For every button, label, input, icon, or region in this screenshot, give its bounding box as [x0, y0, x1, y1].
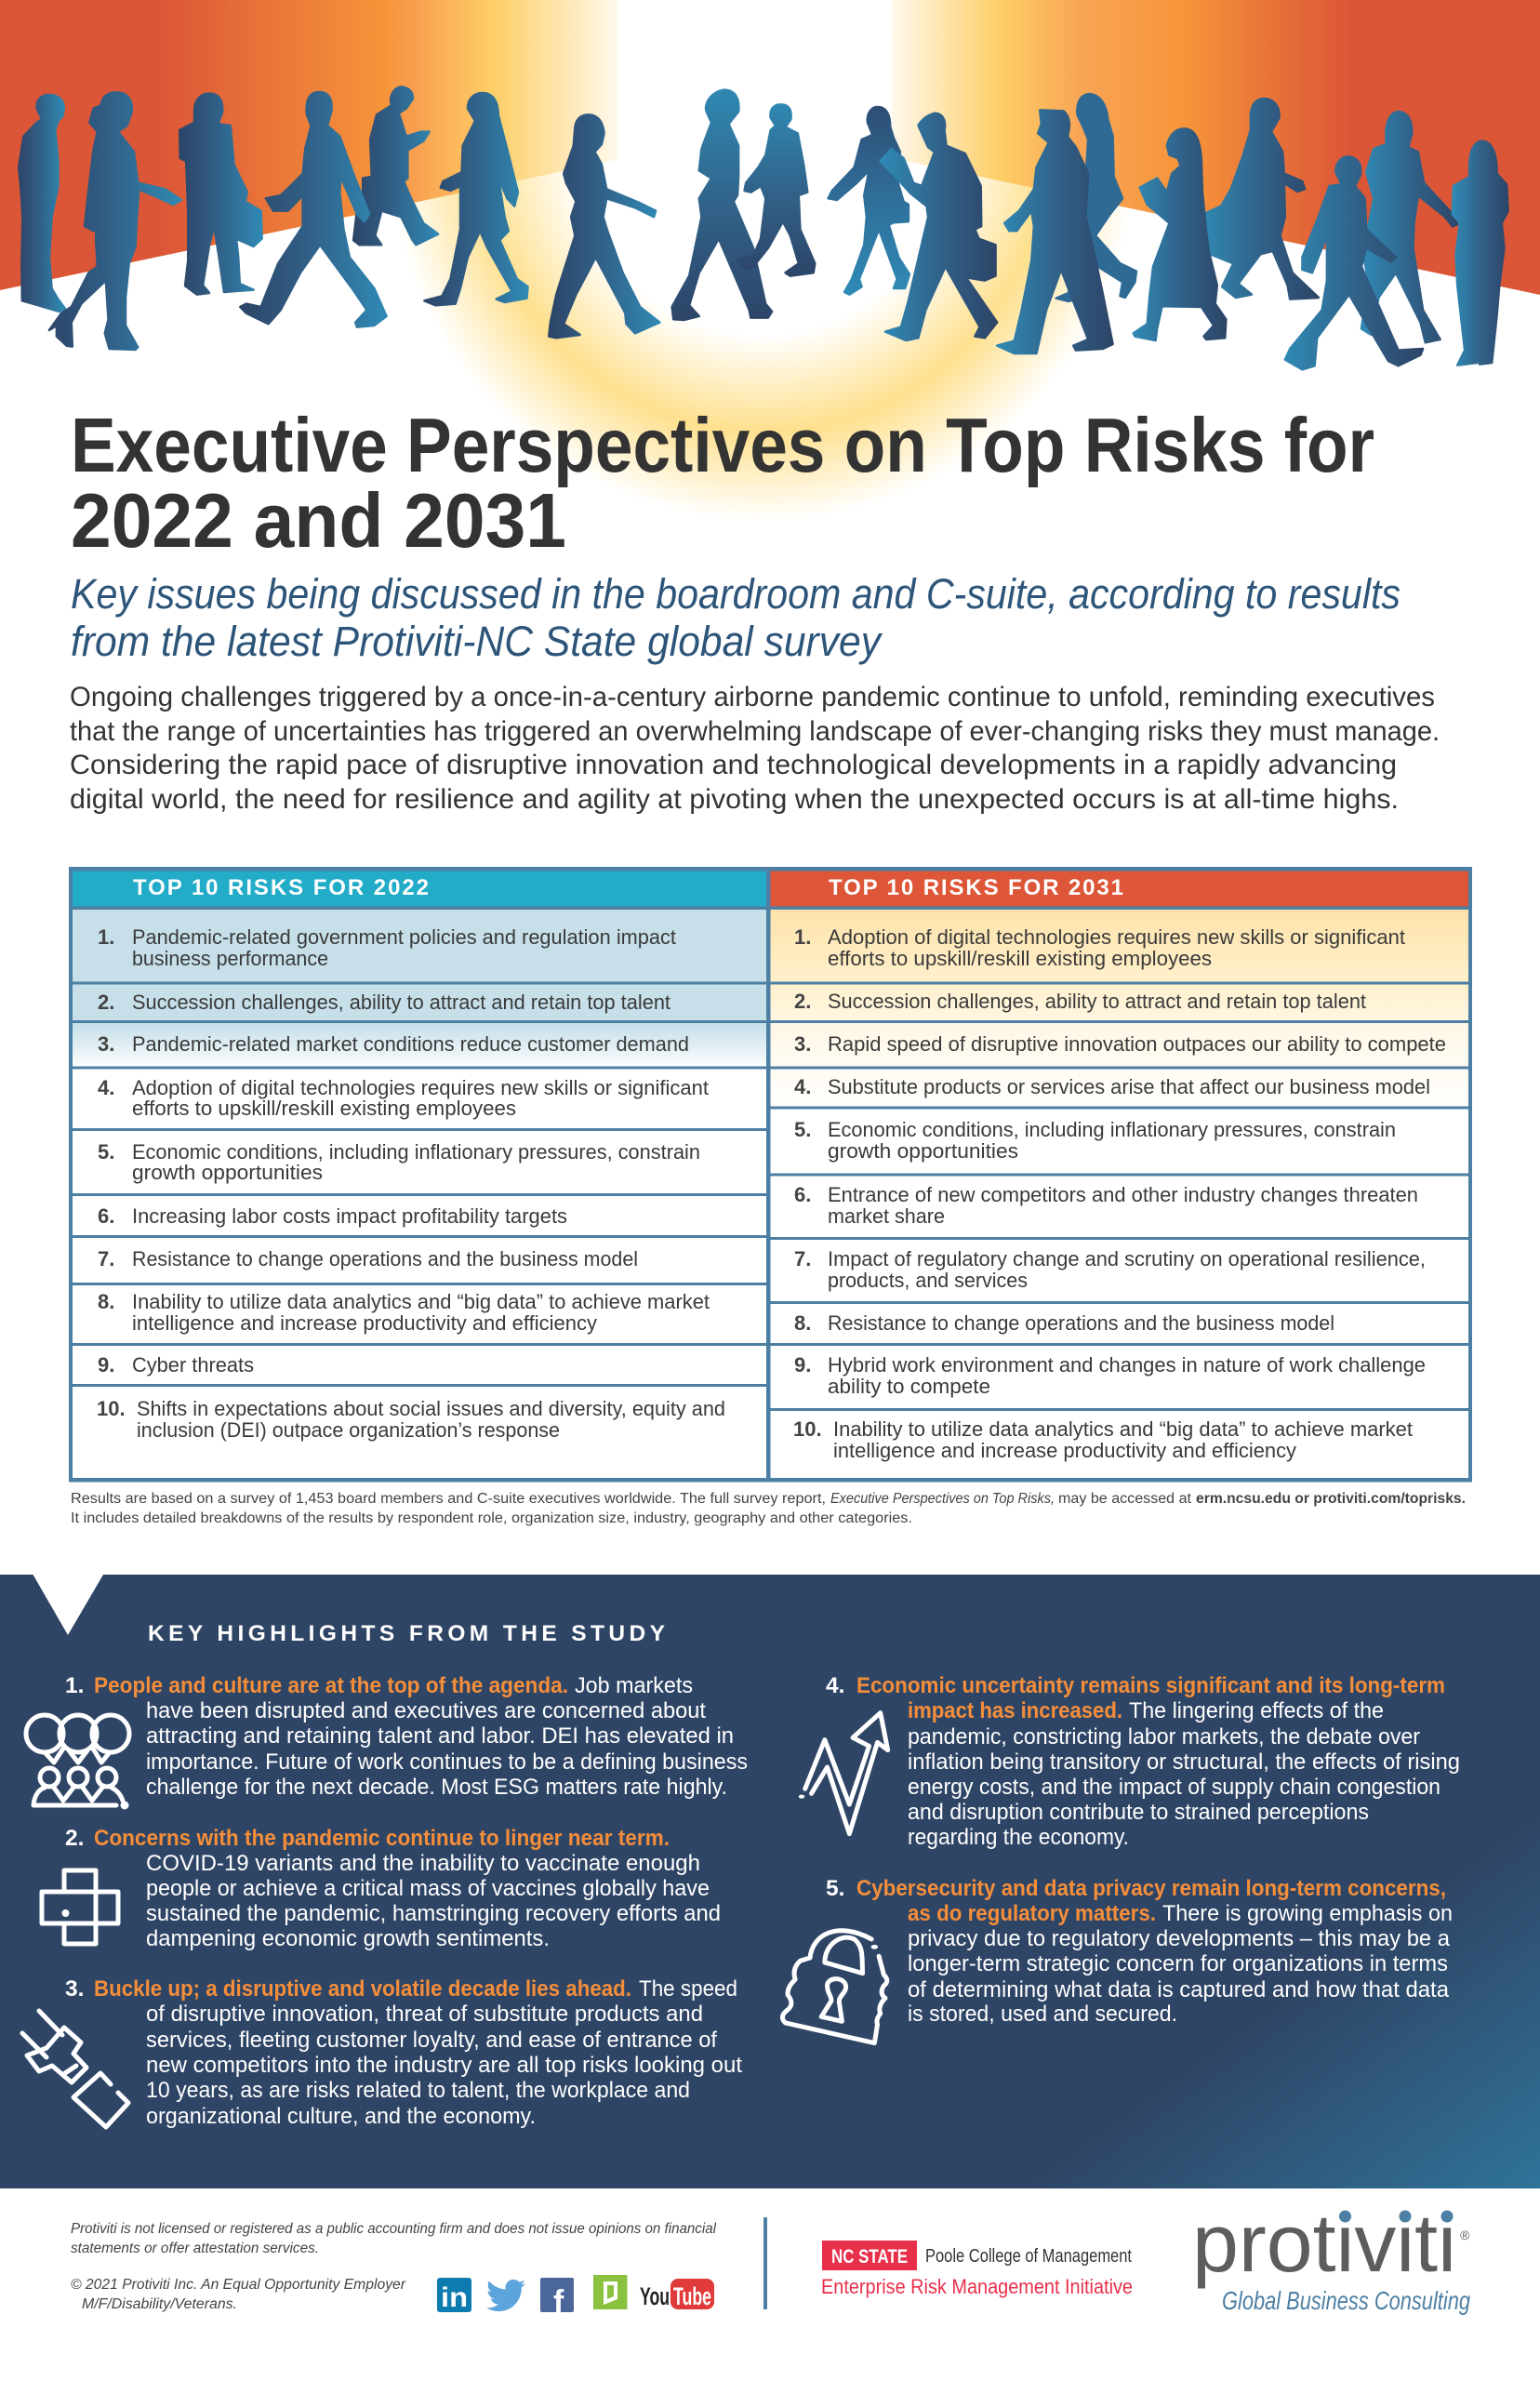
left column fills	[71, 908, 768, 1070]
icon: rising zigzag arrow	[799, 1713, 888, 1834]
right column list: efforts to upskill/reskill existing employees	[828, 947, 1212, 970]
left column list: 8.	[98, 1290, 114, 1313]
highlight 2	[65, 1826, 721, 1951]
left column list: Cyber threats	[132, 1353, 254, 1377]
icon: youtube	[640, 2279, 714, 2310]
subtitle: Key issues being discussed in the boardroom and C-suite, according to results	[71, 570, 1401, 618]
highlight 1: 1.	[65, 1673, 84, 1698]
footer divider	[763, 2217, 767, 2309]
logo: protiviti: ®	[1460, 2228, 1470, 2242]
right column list: Hybrid work environment and changes in nature of work challenge	[828, 1353, 1426, 1377]
right column list: products, and services	[828, 1269, 1028, 1292]
intro paragraph: Ongoing challenges triggered by a once-in-a-century airborne pandemic continue to unfold, reminding executives	[70, 682, 1435, 712]
icon: green d	[593, 2275, 627, 2309]
footer legal text: M/F/Disability/Veterans.	[82, 2296, 237, 2312]
highlight 1: Job markets	[575, 1673, 693, 1698]
key highlights panel	[0, 1575, 1540, 2188]
right column list: 1.	[794, 925, 811, 949]
right column list: Resistance to change operations and the business model	[828, 1311, 1334, 1335]
right column list: growth opportunities	[828, 1139, 1018, 1163]
right column list: 8.	[794, 1311, 811, 1335]
logo: nc state: NC STATE	[831, 2246, 908, 2268]
highlight 4: energy costs, and the impact of supply chain congestion	[908, 1775, 1440, 1800]
right column list: 9.	[794, 1353, 811, 1377]
left column list: 10.	[97, 1397, 126, 1420]
highlight 3: 3.	[65, 1976, 84, 2002]
left column list: 6.	[98, 1204, 114, 1228]
left column list: Economic conditions, including inflationary pressures, constrain	[132, 1140, 700, 1164]
title	[71, 402, 1374, 564]
highlight 5	[826, 1876, 1453, 2027]
highlight 3: of disruptive innovation, threat of substitute products and	[146, 2002, 703, 2027]
highlight 1	[65, 1673, 748, 1800]
highlight 3: services, fleeting customer loyalty, and ease of entrance of	[146, 2028, 717, 2053]
background wall gradient	[0, 0, 1540, 295]
right column list	[793, 925, 1446, 1462]
left column list: Pandemic-related government policies and regulation impact	[132, 925, 676, 949]
icon: linkedin	[437, 2278, 471, 2313]
survey footnote	[71, 1491, 1466, 1526]
highlight 5: longer-term strategic concern for organizations in terms	[908, 1951, 1448, 1976]
right column fills	[769, 908, 1470, 1111]
right column list: 7.	[794, 1247, 811, 1270]
right column list: 10.	[793, 1417, 822, 1441]
section heading: KEY HIGHLIGHTS FROM THE STUDY	[148, 1621, 665, 1646]
highlight 3: 10 years, as are risks related to talent, the workplace and	[146, 2078, 690, 2103]
silhouettes left group	[19, 86, 772, 350]
left column list: 2.	[98, 991, 114, 1014]
notch triangle	[33, 1575, 103, 1635]
left column list: 1.	[98, 925, 114, 949]
left column list: Increasing labor costs impact profitability targets	[132, 1204, 567, 1228]
intro paragraph	[70, 682, 1440, 815]
left column list: 7.	[98, 1247, 114, 1270]
right column list: 4.	[794, 1075, 811, 1098]
footer legal text: Protiviti is not licensed or registered as a public accounting firm and does not issue opinions on financial	[71, 2221, 717, 2237]
highlight 5: privacy due to regulatory developments – this may be a	[908, 1926, 1450, 1951]
survey footnote: It includes detailed breakdowns of the results by respondent role, organization size, industry, geography and other categories.	[71, 1510, 912, 1526]
highlight 4: Economic uncertainty remains significant and its long-term	[856, 1673, 1445, 1698]
table rules	[69, 867, 1472, 1483]
icon: facebook: f	[553, 2284, 564, 2320]
right column list: Rapid speed of disruptive innovation outpaces our ability to compete	[828, 1032, 1446, 1056]
highlight 4: regarding the economy.	[908, 1825, 1129, 1850]
highlight 3: The speed	[639, 1976, 737, 2002]
icon: seat belt buckle	[22, 2011, 128, 2127]
right column list: market share	[828, 1204, 945, 1228]
right column list: ability to compete	[828, 1375, 990, 1398]
highlight 4: pandemic, constricting labor markets, the debate over	[908, 1724, 1420, 1749]
left column list: 3.	[98, 1032, 114, 1056]
intro paragraph: Considering the rapid pace of disruptive innovation and technological developments in a rapidly advancing	[70, 750, 1397, 780]
right column list: 3.	[794, 1032, 811, 1056]
risk table	[69, 867, 1472, 1483]
highlight 1: attracting and retaining talent and labor. DEI has elevated in	[146, 1723, 734, 1749]
icon: facebook	[540, 2278, 574, 2320]
left column list: 5.	[98, 1140, 114, 1164]
title: Executive Perspectives on Top Risks for	[71, 402, 1374, 488]
right column list: Economic conditions, including inflationary pressures, constrain	[828, 1118, 1396, 1141]
icon: people with speech bubbles	[26, 1715, 129, 1807]
left column list: inclusion (DEI) outpace organization’s response	[137, 1418, 560, 1442]
highlight 1: People and culture are at the top of the agenda.	[94, 1673, 568, 1698]
highlight 5: as do regulatory matters.	[908, 1901, 1156, 1926]
icon: padlock	[782, 1931, 887, 2043]
intro paragraph: digital world, the need for resilience and agility at pivoting when the unexpected occurs is at all-time highs.	[70, 784, 1399, 815]
footer legal text: © 2021 Protiviti Inc. An Equal Opportunity Employer	[71, 2277, 406, 2293]
subtitle	[71, 570, 1401, 665]
left column list: Adoption of digital technologies requires new skills or significant	[132, 1076, 709, 1099]
highlight 5: Cybersecurity and data privacy remain long-term concerns,	[856, 1876, 1446, 1901]
left column list: Inability to utilize data analytics and “big data” to achieve market	[132, 1290, 710, 1313]
highlight 4: impact has increased.	[908, 1698, 1122, 1723]
survey footnote: Results are based on a survey of 1,453 board members and C-suite executives worldwide. The full survey report,	[71, 1491, 826, 1507]
survey footnote: Executive Perspectives on Top Risks,	[830, 1491, 1055, 1507]
hero illustration: walking people	[0, 0, 1540, 530]
highlight 3	[65, 1976, 742, 2129]
highlight 4: inflation being transitory or structural, the effects of rising	[908, 1749, 1460, 1775]
icon: youtube: You	[640, 2282, 670, 2310]
icon: youtube: Tube	[673, 2282, 711, 2310]
footer legal text	[71, 2221, 717, 2312]
left column list: intelligence and increase productivity and efficiency	[132, 1311, 597, 1335]
background glow	[372, 0, 1153, 530]
right column list: 5.	[794, 1118, 811, 1141]
logo: protiviti: Global Business Consulting	[1222, 2286, 1470, 2315]
left column list: Shifts in expectations about social issues and diversity, equity and	[137, 1397, 725, 1420]
highlight 5: 5.	[826, 1876, 844, 1901]
right column list: 2.	[794, 990, 811, 1013]
header: top 10 risks for 2031	[769, 870, 1470, 908]
highlight 4: and disruption contribute to strained perceptions	[908, 1800, 1369, 1825]
logo: nc state: Enterprise Risk Management Initiative	[821, 2275, 1133, 2298]
header: top 10 risks for 2022: TOP 10 RISKS FOR 2022	[133, 875, 429, 900]
footer legal text: statements or offer attestation services.	[71, 2241, 319, 2256]
left column list	[97, 925, 725, 1442]
subtitle: from the latest Protiviti-NC State global survey	[71, 618, 883, 665]
highlight 4: 4.	[826, 1673, 844, 1698]
left column list: efforts to upskill/reskill existing employees	[132, 1097, 516, 1120]
right column list: Entrance of new competitors and other industry changes threaten	[828, 1183, 1418, 1206]
highlight 1: have been disrupted and executives are concerned about	[146, 1698, 706, 1723]
logo: nc state: Poole College of Management	[925, 2246, 1132, 2267]
icon: twitter	[486, 2280, 525, 2311]
header: top 10 risks for 2031: TOP 10 RISKS FOR 2031	[829, 875, 1123, 900]
right column list: intelligence and increase productivity and efficiency	[833, 1439, 1296, 1462]
highlight 5: There is growing emphasis on	[1162, 1901, 1453, 1926]
right column list: Substitute products or services arise that affect our business model	[828, 1075, 1430, 1098]
highlight 5: is stored, used and secured.	[908, 2002, 1177, 2027]
intro paragraph: that the range of uncertainties has triggered an overwhelming landscape of ever-changing risks they must manage.	[70, 716, 1440, 747]
icon: linkedin: in	[441, 2282, 468, 2313]
left column list: business performance	[132, 947, 328, 970]
left column list: 9.	[98, 1353, 114, 1377]
icon: medical cross	[42, 1870, 118, 1944]
highlight 2: 2.	[65, 1826, 84, 1851]
silhouettes right group	[737, 94, 1508, 369]
highlight 5: of determining what data is captured and how that data	[908, 1977, 1449, 2002]
highlight 3: new competitors into the industry are all top risks looking out	[146, 2053, 742, 2078]
left column list: Resistance to change operations and the business model	[132, 1247, 638, 1270]
highlight 2: sustained the pandemic, hamstringing recovery efforts and	[146, 1901, 721, 1926]
left column list: Succession challenges, ability to attract and retain top talent	[132, 991, 670, 1014]
highlight 2: dampening economic growth sentiments.	[146, 1926, 550, 1951]
logo: nc state	[821, 2241, 1133, 2298]
header: top 10 risks for 2022	[71, 870, 768, 908]
highlight 1: challenge for the next decade. Most ESG matters rate highly.	[146, 1775, 727, 1800]
left column list: 4.	[98, 1076, 114, 1099]
highlight 4: The lingering effects of the	[1129, 1698, 1384, 1723]
highlight 2: people or achieve a critical mass of vaccines globally have	[146, 1876, 710, 1901]
survey footnote: may be accessed at	[1058, 1491, 1192, 1507]
highlight 2: Concerns with the pandemic continue to linger near term.	[94, 1826, 670, 1851]
title: 2022 and 2031	[71, 477, 566, 564]
highlight 3: organizational culture, and the economy.	[146, 2104, 536, 2129]
right column list: 6.	[794, 1183, 811, 1206]
right column list: Impact of regulatory change and scrutiny on operational resilience,	[828, 1247, 1426, 1270]
survey footnote: erm.ncsu.edu or protiviti.com/toprisks.	[1196, 1491, 1466, 1507]
right column list: Succession challenges, ability to attract and retain top talent	[828, 990, 1366, 1013]
highlight 1: importance. Future of work continues to be a defining business	[146, 1749, 748, 1775]
right column list: Adoption of digital technologies requires new skills or significant	[828, 925, 1405, 949]
left column list: Pandemic-related market conditions reduce customer demand	[132, 1032, 689, 1056]
highlight 4	[826, 1673, 1460, 1850]
logo: protiviti: protiviti	[1192, 2197, 1456, 2289]
left column list: growth opportunities	[132, 1161, 323, 1184]
right column list: Inability to utilize data analytics and “big data” to achieve market	[833, 1417, 1413, 1441]
highlight 2: COVID-19 variants and the inability to vaccinate enough	[146, 1851, 700, 1876]
highlight 3: Buckle up; a disruptive and volatile decade lies ahead.	[94, 1976, 631, 2002]
